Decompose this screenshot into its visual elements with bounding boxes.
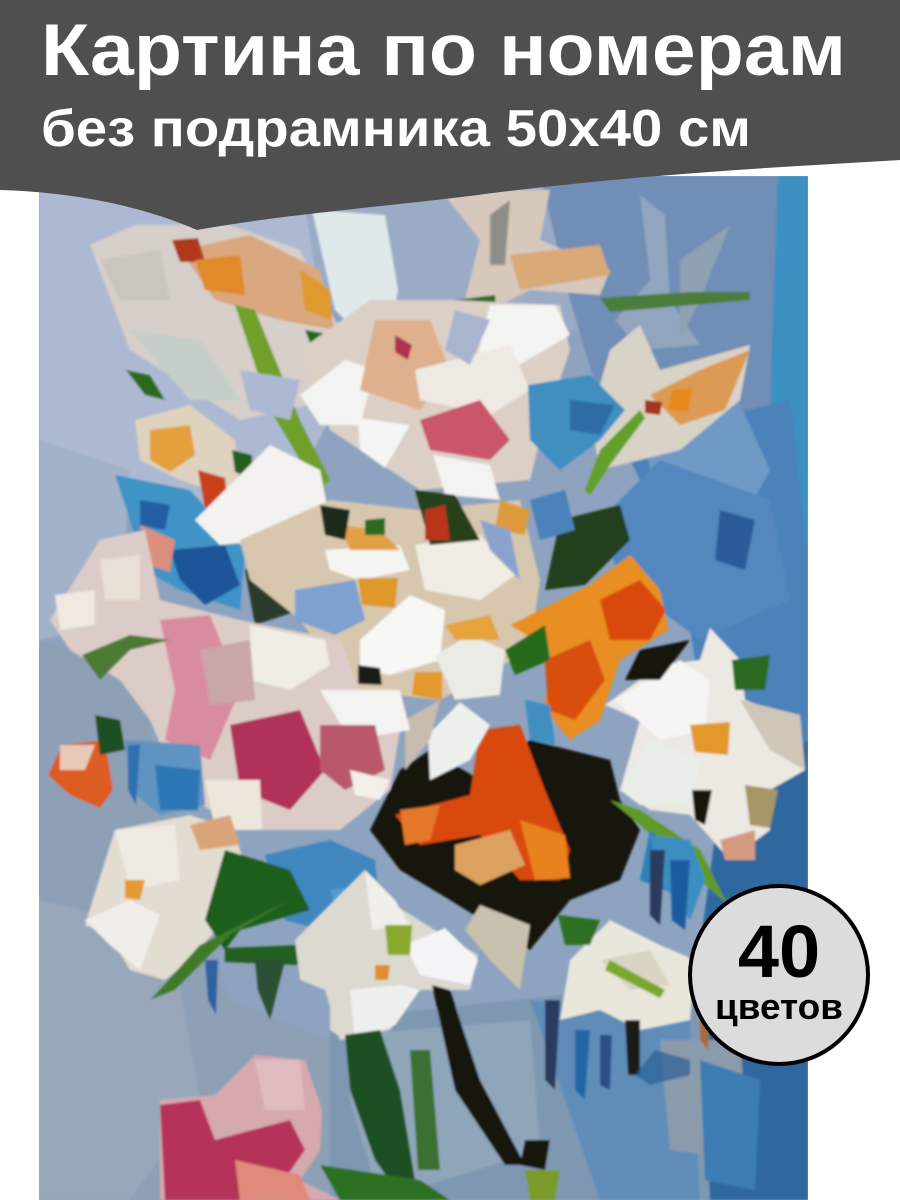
badge: 40 colours: цветов	[715, 986, 843, 1027]
flower: lower left white	[85, 815, 250, 980]
vase and stems	[320, 985, 560, 1200]
flower: orange poppy right	[505, 555, 668, 740]
flower: top spray	[446, 188, 752, 314]
flower: lower right white	[545, 835, 705, 1100]
flower: far left orange bud	[48, 715, 205, 815]
flower: central white bunch	[195, 445, 630, 700]
flower: bottom pink	[160, 1055, 340, 1200]
badge: 40 colours: 40	[738, 910, 820, 993]
badge: 40 colours	[690, 886, 868, 1064]
flower: right orange and beige	[528, 325, 750, 495]
flower: centre white and peach	[300, 300, 570, 500]
panel: flower painting	[39, 176, 808, 1200]
header banner	[0, 0, 900, 230]
subtitle: без подрамника 50х40 см	[41, 100, 751, 158]
strokes: green leaves and drips	[128, 745, 712, 1085]
flower: top left beige spray	[90, 225, 340, 490]
flower: left blue cluster	[115, 475, 300, 625]
flower: right white lily	[605, 628, 805, 860]
title: Картина по номерам	[41, 10, 846, 91]
flower: dark centre and orange poppy	[370, 700, 728, 950]
flower: blue and green mid	[205, 840, 380, 1020]
flower: left pink cluster	[50, 530, 410, 830]
flower: left orange	[135, 405, 252, 510]
painting background	[39, 176, 808, 1200]
flower: lower centre white	[295, 870, 530, 1040]
